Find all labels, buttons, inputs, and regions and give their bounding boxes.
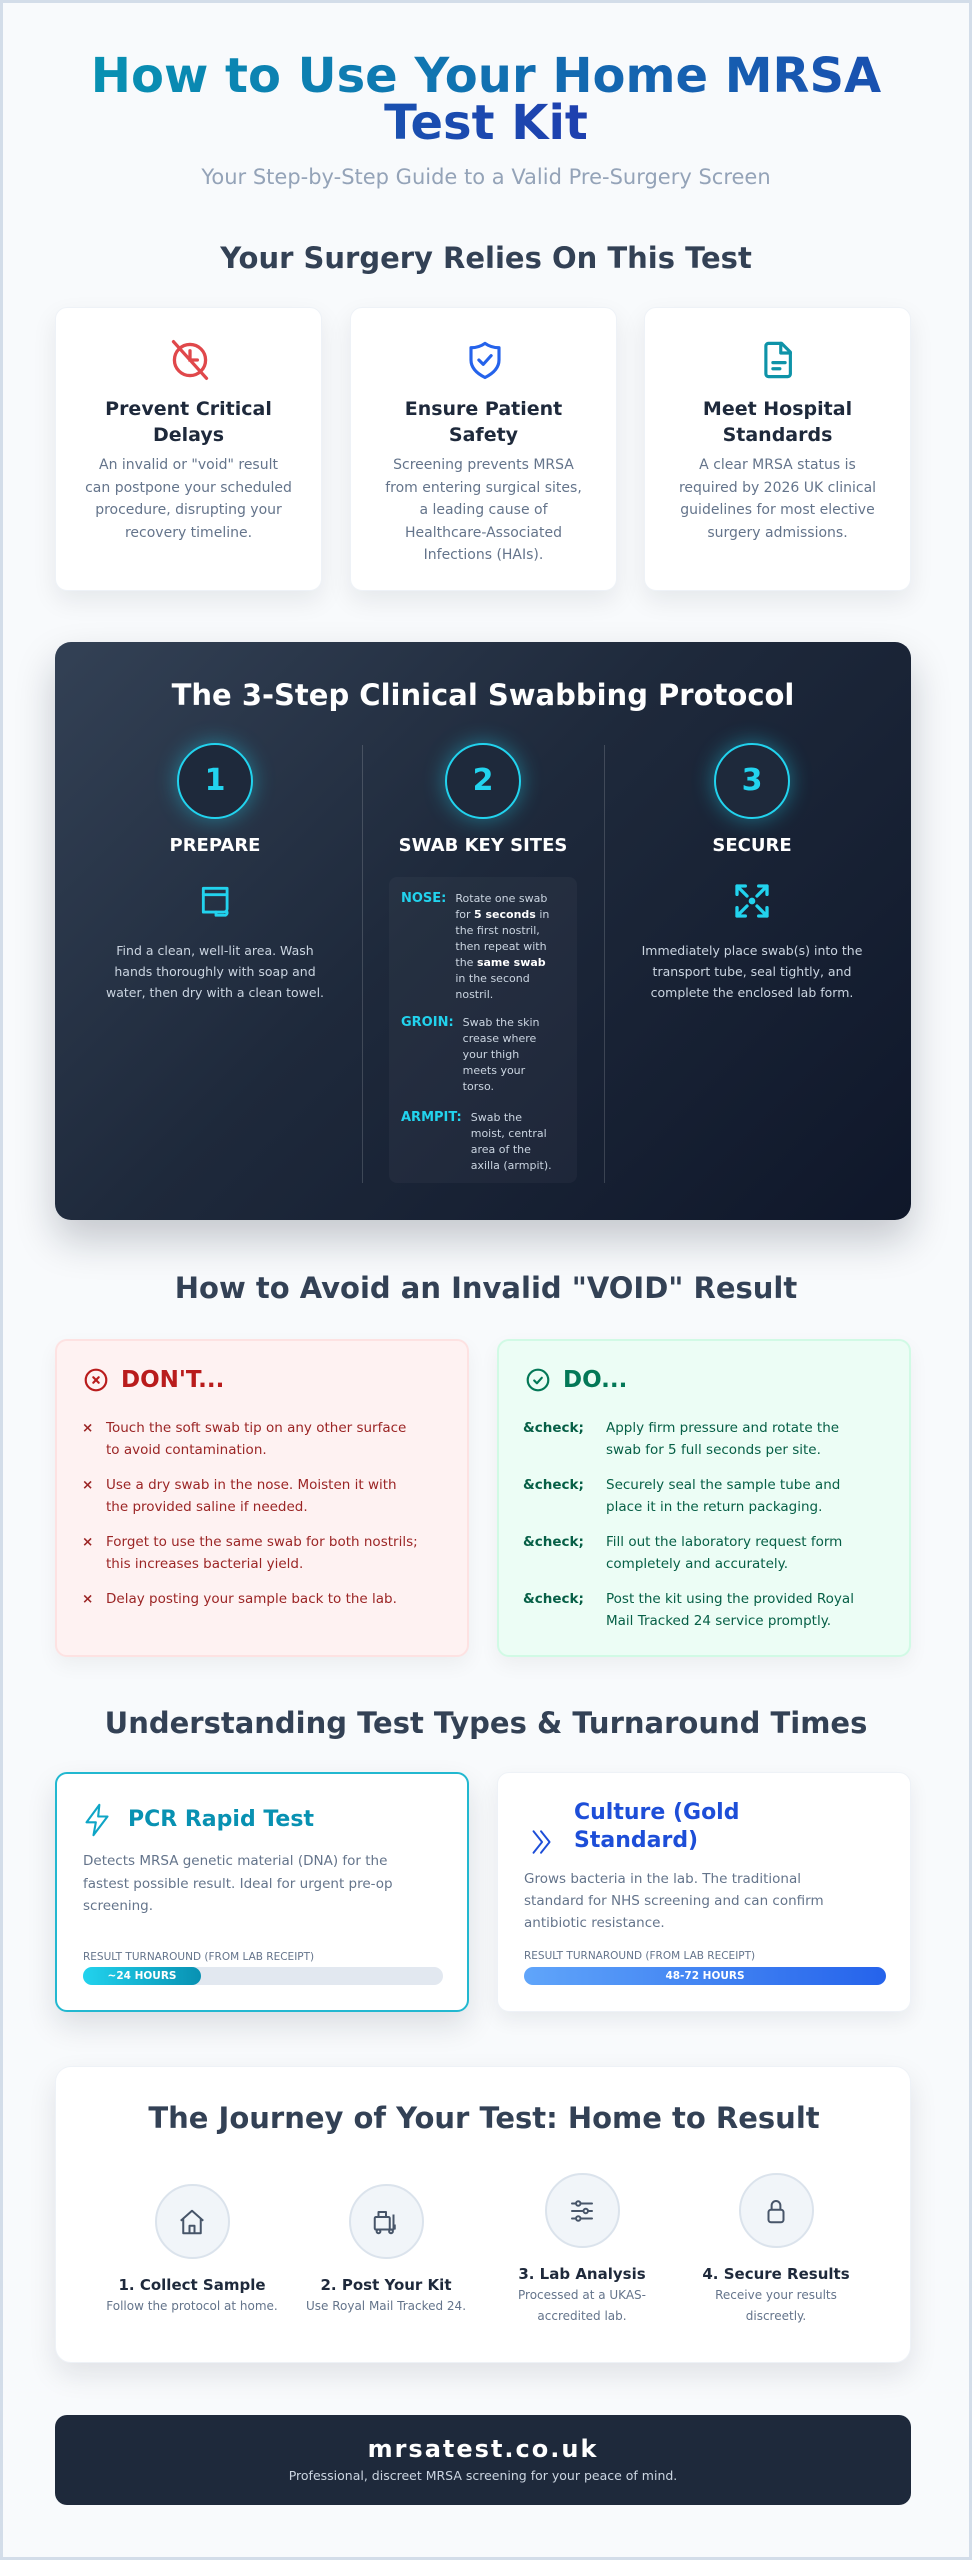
card text [679, 457, 876, 540]
card text: a leading cause of [419, 502, 548, 518]
site: armpit: ARMPIT: [401, 1110, 462, 1125]
step text [642, 943, 862, 1000]
item 2 [523, 1477, 840, 1515]
journey step 4: 4. Secure Results [702, 2265, 850, 2283]
footer [55, 2415, 911, 2505]
card title [105, 398, 272, 446]
step text: transport tube, seal tightly, and [653, 964, 851, 979]
card text: Screening prevents MRSA [393, 457, 574, 473]
card: patient safety [350, 307, 617, 591]
card text: recovery timeline. [125, 524, 252, 540]
pcr description: fastest possible result. Ideal for urgent pre-op [83, 1876, 393, 1892]
journey step 4: discreetly. [746, 2309, 806, 2323]
title [91, 48, 881, 151]
culture description: antibiotic resistance. [524, 1915, 665, 1931]
site: nose: then repeat with [455, 940, 547, 953]
site: nose: nostril. [455, 988, 493, 1001]
panel: do [497, 1339, 911, 1657]
subtitle: Your Step-by-Step Guide to a Valid Pre-Surgery Screen [201, 165, 771, 189]
step label: PREPARE [170, 835, 260, 856]
icon: towel [202, 886, 229, 917]
site: armpit: Swab the [471, 1111, 522, 1124]
card title: Prevent Critical [105, 398, 272, 420]
turnaround bar [83, 1967, 443, 1985]
site: nose: the same swab [455, 956, 546, 969]
site: groin: your thigh [463, 1048, 519, 1061]
card title: Standards [723, 424, 832, 446]
site: groin: meets your [463, 1064, 525, 1077]
turnaround bar [524, 1967, 886, 1985]
footer tagline: Professional, discreet MRSA screening for your peace of mind. [289, 2468, 677, 2483]
item 2: Securely seal the sample tube and [606, 1477, 840, 1493]
site: groin: GROIN: [401, 1015, 454, 1030]
step text [106, 943, 324, 1000]
pcr description: screening. [83, 1898, 153, 1914]
item 3 [523, 1534, 842, 1572]
card text: guidelines for most elective [680, 502, 875, 518]
step 1 [106, 732, 324, 1000]
site: groin: torso. [463, 1080, 494, 1093]
item 2: × [82, 1477, 93, 1493]
site: nose: in the second [455, 972, 530, 985]
site: groin: Swab the skin [463, 1016, 540, 1029]
card title: Safety [449, 424, 518, 446]
item 4: Mail Tracked 24 service promptly. [606, 1613, 831, 1629]
journey step 3: accredited lab. [537, 2309, 627, 2323]
item 3: × [82, 1534, 93, 1550]
item 3: &check; [523, 1534, 584, 1550]
icon: document [764, 342, 792, 378]
icon: padlock [738, 2173, 814, 2248]
item 1: to avoid contamination. [106, 1442, 267, 1458]
step label: SECURE [712, 835, 792, 856]
card: culture test [497, 1772, 911, 2012]
icon: trolley [348, 2184, 424, 2259]
item 4: Post the kit using the provided Royal [606, 1591, 854, 1607]
pcr description: Detects MRSA genetic material (DNA) for the [83, 1853, 387, 1869]
step text: water, then dry with a clean towel. [106, 985, 324, 1000]
site: nose: Rotate one swab [455, 892, 547, 905]
card text: from entering surgical sites, [385, 480, 582, 496]
turnaround label: RESULT TURNAROUND (FROM LAB RECEIPT) [83, 1951, 314, 1963]
panel title: The 3-Step Clinical Swabbing Protocol [172, 678, 794, 712]
journey step 2 [306, 2184, 466, 2313]
panel: don't [55, 1339, 469, 1657]
journey step 1: Follow the protocol at home. [106, 2299, 278, 2313]
journey title: The Journey of Your Test: Home to Result [148, 2101, 820, 2135]
heading: do: DO... [563, 1367, 627, 1393]
site: nose: NOSE: [401, 891, 446, 906]
item 3: Forget to use the same swab for both nostrils; [106, 1534, 418, 1550]
icon: lightning [85, 1804, 109, 1836]
number circle 2 [445, 743, 521, 819]
item 3: completely and accurately. [606, 1556, 788, 1572]
journey step 2: 2. Post Your Kit [320, 2276, 452, 2294]
journey step 3: 3. Lab Analysis [518, 2265, 646, 2283]
pcr description [83, 1853, 393, 1914]
culture icon: chevrons [532, 1830, 550, 1854]
item 1 [82, 1420, 406, 1458]
culture description: standard for NHS screening and can confirm [524, 1893, 824, 1909]
icon: house [154, 2184, 230, 2259]
journey step 4: Receive your results [715, 2288, 837, 2302]
card text [85, 457, 292, 540]
icon: expand arrows [735, 884, 769, 918]
icon: shield check [469, 342, 501, 380]
item 1: × [82, 1420, 93, 1436]
number circle 3 [714, 743, 790, 819]
journey step 1 [106, 2184, 278, 2313]
number circle 2: 2 [473, 763, 493, 798]
item 4: &check; [523, 1591, 584, 1607]
step text: hands thoroughly with soap and [114, 964, 316, 979]
item 1: swab for 5 full seconds per site. [606, 1442, 821, 1458]
site: nose: for 5 seconds in [455, 908, 549, 921]
card title: Meet Hospital [703, 398, 852, 420]
turnaround bar: ~24 HOURS [108, 1970, 176, 1982]
turnaround bar: 48-72 HOURS [665, 1970, 745, 1982]
step text: Immediately place swab(s) into the [642, 943, 862, 958]
card title [703, 398, 852, 446]
heading: don't: DON'T... [121, 1367, 224, 1393]
item 1: Touch the soft swab tip on any other surface [106, 1420, 406, 1436]
item 3 [82, 1534, 418, 1572]
swab sites box [389, 877, 577, 1183]
card text [385, 457, 582, 563]
culture heading: Culture (Gold [574, 1800, 739, 1825]
site: armpit: axilla (armpit). [471, 1159, 552, 1172]
step 2 [399, 732, 567, 1172]
number circle 3: 3 [742, 763, 762, 798]
icon: sliders [544, 2173, 620, 2248]
number circle 1 [177, 743, 253, 819]
card: prevent delays [55, 307, 322, 591]
card text: An invalid or "void" result [99, 457, 278, 473]
step text: Find a clean, well-lit area. Wash [116, 943, 314, 958]
turnaround label: RESULT TURNAROUND (FROM LAB RECEIPT) [524, 1950, 755, 1962]
step label: SWAB KEY SITES [399, 835, 567, 856]
journey step 1: 1. Collect Sample [118, 2276, 266, 2294]
item 3: Fill out the laboratory request form [606, 1534, 842, 1550]
site: nose [401, 891, 549, 1001]
card text: Healthcare-Associated [405, 524, 562, 540]
culture description [524, 1871, 824, 1931]
item 2: the provided saline if needed. [106, 1499, 308, 1515]
item 3: this increases bacterial yield. [106, 1556, 303, 1572]
pcr heading [85, 1804, 314, 1836]
item 2: place it in the return packaging. [606, 1499, 822, 1515]
site: groin [401, 1015, 540, 1093]
card title: Delays [153, 424, 224, 446]
heading: avoid void: How to Avoid an Invalid "VOID" Result [175, 1271, 797, 1305]
journey step 2: Use Royal Mail Tracked 24. [306, 2299, 466, 2313]
heading: test types: Understanding Test Types & Turnaround Times [105, 1706, 867, 1740]
pcr heading: PCR Rapid Test [128, 1807, 314, 1832]
panel: 3-step protocol [55, 642, 911, 1220]
icon: clock crossed [172, 340, 208, 380]
heading: do [526, 1367, 627, 1393]
culture heading [574, 1800, 739, 1853]
title: How to Use Your Home MRSA [91, 48, 881, 104]
site: nose: the first nostril, [455, 924, 540, 937]
card text: can postpone your scheduled [85, 480, 292, 496]
card text: A clear MRSA status is [699, 457, 856, 473]
site: armpit: area of the [471, 1143, 531, 1156]
journey step 3: Processed at a UKAS- [518, 2288, 646, 2302]
card text: procedure, disrupting your [95, 502, 282, 518]
step 3 [642, 732, 862, 1000]
card: PCR rapid test [55, 1772, 469, 2012]
item 2 [82, 1477, 397, 1515]
heading: surgery relies: Your Surgery Relies On This Test [220, 241, 752, 275]
card title [405, 398, 562, 446]
card title: Ensure Patient [405, 398, 562, 420]
footer brand: mrsatest.co.uk [368, 2435, 598, 2463]
item 1 [523, 1420, 839, 1458]
card text: Infections (HAIs). [424, 547, 543, 563]
journey step 4 [679, 2173, 873, 2327]
title: Test Kit [384, 95, 588, 151]
item 4 [523, 1591, 854, 1629]
site: armpit [401, 1110, 552, 1172]
step text: complete the enclosed lab form. [651, 985, 853, 1000]
card text: surgery admissions. [707, 524, 848, 540]
item 1: &check; [523, 1420, 584, 1436]
card text: required by 2026 UK clinical [679, 480, 876, 496]
panel: journey [55, 2066, 911, 2363]
journey step 3 [518, 2173, 646, 2323]
item 2: Use a dry swab in the nose. Moisten it with [106, 1477, 397, 1493]
item 1: Apply firm pressure and rotate the [606, 1420, 839, 1436]
culture heading: Standard) [574, 1828, 698, 1853]
number circle 1: 1 [205, 763, 225, 798]
culture description: Grows bacteria in the lab. The traditional [524, 1871, 801, 1887]
item 4: Delay posting your sample back to the lab. [106, 1591, 397, 1607]
item 4: × [82, 1591, 93, 1607]
panel: importance cards [54, 307, 912, 602]
item 2: &check; [523, 1477, 584, 1493]
site: groin: crease where [463, 1032, 536, 1045]
site: armpit: moist, central [471, 1127, 547, 1140]
card: hospital standards [644, 307, 911, 591]
